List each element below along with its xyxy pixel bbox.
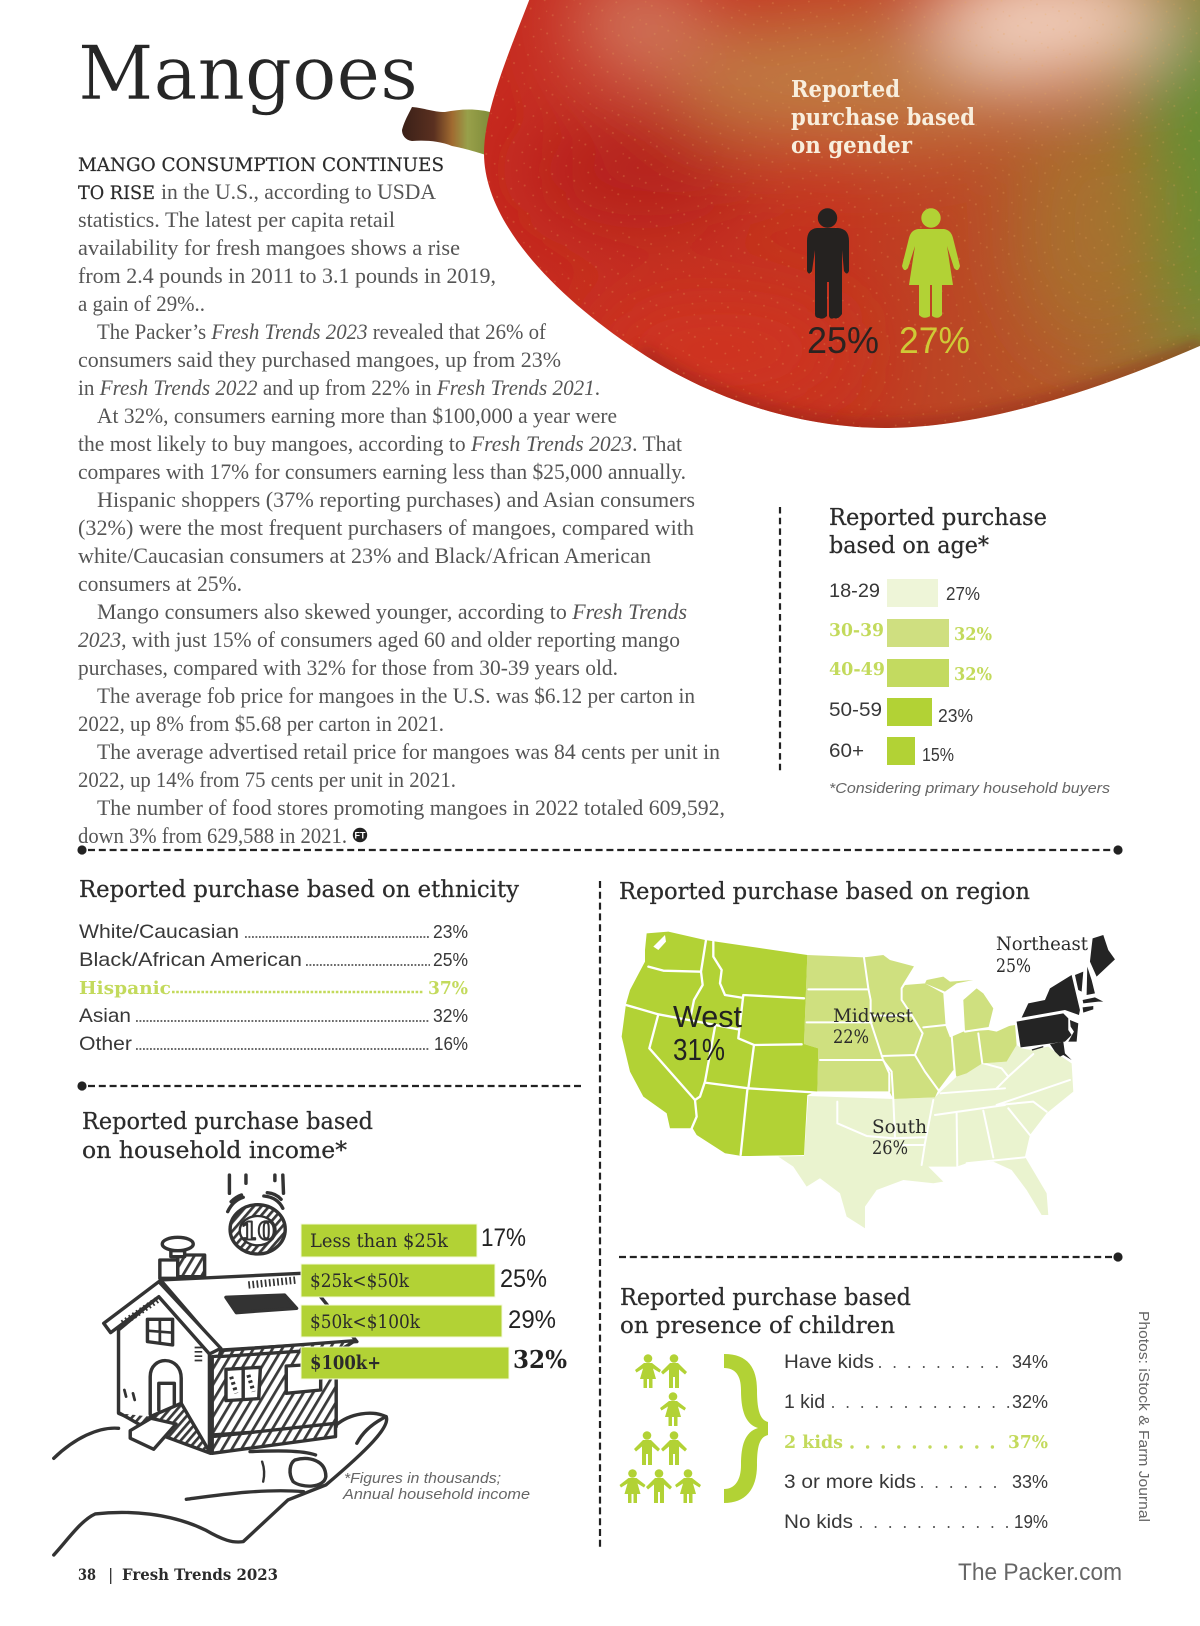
panel: age [829, 505, 1111, 797]
icon: falling coin: 10 [240, 1217, 275, 1245]
ethnicity list: 25% [433, 950, 468, 970]
article text: purchases, compared with 32% for those from 30-39 years old. [78, 655, 618, 680]
article text: 2023, with just 15% of consumers aged 60 and older reporting mango [78, 627, 680, 652]
children list: 37% [1008, 1432, 1048, 1453]
article text: Hispanic shoppers (37% reporting purchases) and Asian consumers [97, 487, 695, 512]
footer: page and publication: | [108, 1565, 113, 1584]
ethnicity list: Asian [79, 1005, 131, 1027]
heading: age [829, 505, 1047, 559]
heading: gender: purchase based [791, 104, 975, 131]
article text: in the U.S., according to USDA [161, 179, 436, 204]
income labels: $100k+ [310, 1352, 381, 1374]
age labels: 40-49 [829, 659, 885, 680]
income labels [310, 1230, 448, 1374]
income percentages: 29% [508, 1306, 556, 1334]
article text: 2022, up 14% from 75 cents per unit in 2021. [78, 767, 456, 792]
income footnote: *Figures in thousands; [344, 1470, 501, 1487]
heading: income: Reported purchase based [82, 1109, 373, 1135]
female percent: 27% [899, 320, 970, 361]
children list [784, 1351, 1048, 1533]
title: Mangoes [78, 29, 418, 117]
mango photo [402, 0, 1200, 438]
panel: gender [791, 76, 975, 361]
article text: compares with 17% for consumers earning less than $25,000 annually. [78, 459, 686, 484]
children list: 32% [1012, 1392, 1048, 1412]
income footnote [342, 1470, 530, 1503]
heading: children: Reported purchase based [620, 1285, 911, 1311]
map region: Northeast [1017, 935, 1115, 1060]
map region: West [622, 932, 818, 1156]
heading: gender: on gender [791, 132, 913, 159]
icon: FT end mark: FT [354, 830, 366, 840]
footer: page and publication: 38 [78, 1565, 96, 1584]
article text: consumers said they purchased mangoes, up from 23% [78, 347, 561, 372]
article text: white/Caucasian consumers at 23% and Black/African American [78, 543, 651, 568]
male percent: 25% [807, 320, 879, 361]
heading: income: on household income* [82, 1138, 348, 1164]
ethnicity list: 23% [433, 922, 468, 942]
age bars [887, 579, 949, 765]
icon: kids figures [620, 1354, 701, 1503]
panel: region [619, 879, 1115, 1228]
article text: MANGO CONSUMPTION CONTINUES [78, 155, 444, 176]
panel: ethnicity [79, 877, 519, 1055]
icon: hand [54, 1413, 387, 1555]
children list: 33% [1012, 1472, 1048, 1492]
age labels: 32% [954, 664, 992, 685]
article text: At 32%, consumers earning more than $100,000 a year were [97, 403, 617, 428]
map labels: 22% [833, 1026, 869, 1048]
income bars [301, 1224, 509, 1379]
article text: from 2.4 pounds in 2011 to 3.1 pounds in 2019, [78, 263, 496, 288]
income percentages: 17% [481, 1224, 526, 1252]
article text: down 3% from 629,588 in 2021. [78, 823, 347, 848]
age labels: 30-39 [829, 620, 884, 641]
ethnicity list: 32% [433, 1006, 468, 1026]
map region: Midwest [804, 955, 1017, 1099]
children list: 1 kid [784, 1391, 825, 1413]
income percentages: 25% [500, 1265, 547, 1293]
article text: statistics. The latest per capita retail [78, 207, 395, 232]
article text: 2022, up 8% from $5.68 per carton in 2021. [78, 711, 444, 736]
map labels: West [673, 999, 742, 1034]
article text: the most likely to buy mangoes, according to Fresh Trends 2023. That [78, 431, 682, 456]
heading: children [620, 1285, 911, 1339]
age labels: 15% [922, 745, 954, 765]
children list: 3 or more kids [784, 1471, 916, 1493]
income labels: $50k<$100k [310, 1311, 420, 1333]
photo credit: Photos: iStock & Farm Journal [1135, 1311, 1152, 1522]
icon: falling coin [228, 1175, 285, 1254]
heading: gender: Reported [791, 76, 900, 103]
age labels [829, 580, 992, 765]
map labels: Midwest [833, 1005, 913, 1027]
children list: No kids [784, 1511, 853, 1533]
heading: ethnicity: Reported purchase based on ethnicity [79, 877, 519, 903]
illustration: house on hand with coin [54, 1175, 387, 1555]
map labels: 25% [996, 955, 1031, 977]
children list: 34% [1012, 1352, 1048, 1372]
ethnicity list: 37% [428, 978, 468, 999]
article text: a gain of 29%.. [78, 291, 205, 316]
age labels: 23% [938, 706, 973, 726]
map region: South [778, 1045, 1073, 1228]
article text: in Fresh Trends 2022 and up from 22% in Fresh Trends 2021. [78, 375, 600, 400]
footer: page and publication: Fresh Trends 2023 [122, 1565, 278, 1584]
article text: The number of food stores promoting mangoes in 2022 totaled 609,592, [97, 795, 725, 820]
map labels: South [872, 1116, 927, 1138]
map labels [673, 933, 1088, 1159]
income labels: Less than $25k [310, 1230, 448, 1252]
heading: age: Reported purchase [829, 505, 1047, 531]
icon: FT end mark [353, 828, 367, 842]
children list: 2 kids [784, 1432, 843, 1453]
heading: age: based on age* [829, 533, 989, 559]
article text: The average fob price for mangoes in the U.S. was $6.12 per carton in [97, 683, 695, 708]
age labels: 60+ [829, 740, 864, 762]
map labels: Northeast [996, 933, 1088, 955]
article text: Mango consumers also skewed younger, according to Fresh Trends [97, 599, 687, 624]
article text: The average advertised retail price for mangoes was 84 cents per unit in [97, 739, 720, 764]
children list: 19% [1014, 1512, 1048, 1532]
income labels: $25k<$50k [310, 1270, 409, 1292]
article text: consumers at 25%. [78, 571, 242, 596]
icon: man [807, 208, 849, 319]
age labels: 50-59 [829, 699, 882, 721]
article text: (32%) were the most frequent purchasers of mangoes, compared with [78, 515, 694, 540]
heading: region: Reported purchase based on region [619, 879, 1030, 905]
icon: curly brace [724, 1354, 768, 1503]
icon: house [104, 1237, 357, 1453]
age labels: 18-29 [829, 580, 880, 602]
age footnote: *Considering primary household buyers [829, 780, 1111, 797]
age labels: 27% [946, 584, 980, 604]
US map [622, 932, 1115, 1228]
ethnicity list: Black/African American [79, 949, 302, 971]
map labels: 26% [872, 1137, 908, 1159]
icon: mango stem [402, 107, 493, 155]
panel: children [620, 1285, 1048, 1533]
ethnicity list [79, 921, 468, 1055]
heading: income [82, 1109, 373, 1164]
heading: children: on presence of children [620, 1313, 895, 1339]
article text: availability for fresh mangoes shows a rise [78, 235, 460, 260]
ethnicity list: Other [79, 1033, 133, 1055]
article text: The Packer’s Fresh Trends 2023 revealed that 26% of [97, 319, 547, 344]
age labels: 32% [954, 624, 992, 645]
children list: Have kids [784, 1351, 874, 1373]
icon: woman [902, 208, 960, 318]
panel: income [54, 1109, 567, 1555]
ethnicity list: Hispanic [79, 978, 171, 999]
article text: TO RISE [78, 183, 155, 204]
income percentages [481, 1224, 567, 1374]
ethnicity list: White/Caucasian [79, 921, 239, 943]
footer: website: The Packer.com [958, 1559, 1122, 1586]
heading: gender [791, 76, 975, 159]
map labels: 31% [673, 1032, 725, 1067]
income percentages: 32% [513, 1345, 567, 1374]
ethnicity list: 16% [434, 1034, 468, 1054]
income footnote: Annual household income [342, 1486, 530, 1503]
article text [78, 155, 725, 848]
